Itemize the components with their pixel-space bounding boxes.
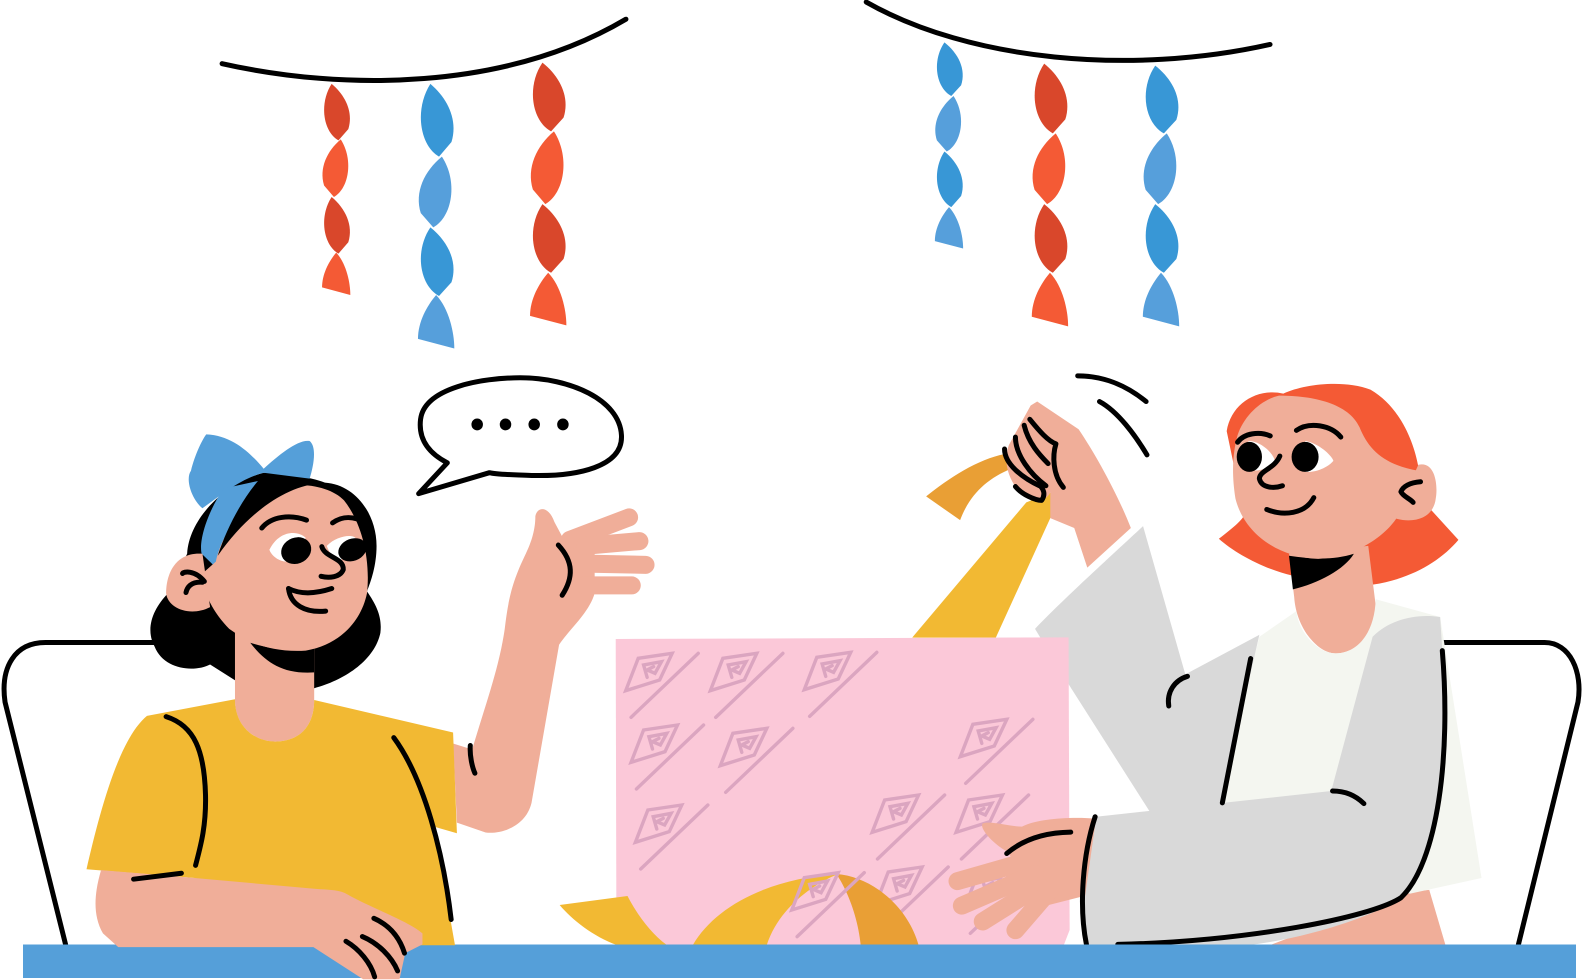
neck shadow [1289,554,1354,589]
lower body [1259,890,1447,949]
ribbon: left tail [560,896,667,945]
chair: left [4,643,156,945]
streamer: blue 1 [418,84,454,349]
face details [1237,425,1421,513]
garlands and streamers [222,2,1270,349]
fingers [1005,419,1063,500]
streamer: red 1 [322,84,350,295]
table [23,944,1576,978]
ear [1394,464,1436,520]
body lines [134,545,570,977]
face details [183,517,370,611]
wrapping paper [616,637,1070,947]
streamer: red 3 [1032,64,1068,326]
paper pattern [626,652,1037,933]
raised arm [1006,402,1131,568]
person: left [87,378,646,979]
neck and collar skin [235,617,314,742]
face [1233,396,1418,559]
garland: right [866,2,1270,60]
chair: right [1444,643,1579,945]
headband [201,481,260,566]
ribbon: arch orange [836,874,919,945]
person: right, background layers [912,376,1482,949]
blue bow [189,434,314,508]
paper pattern over ribbon [792,873,864,937]
neck shadow [250,643,314,673]
hand [957,818,1096,930]
resting arm and hand [96,870,422,979]
white shirt [1209,599,1482,894]
hand and cuff lines [1007,817,1095,944]
streamer: blue 2 [935,42,963,249]
streamer: blue 3 [1143,66,1179,326]
gift box [560,637,1070,947]
garland: left [222,19,626,80]
jacket front and lower sleeve [1084,616,1443,945]
jacket lines [1118,651,1445,944]
neck [1289,546,1376,653]
raised arm and hand [453,509,646,833]
chairs [4,643,1579,945]
speech bubble [419,378,622,494]
ribbon: arch yellow [693,874,838,945]
hair fringe [218,475,325,556]
right person hand on box [957,817,1096,944]
back hair [150,473,381,688]
raised jacket sleeve [1035,526,1259,813]
motion lines [1078,376,1147,455]
streamer: red 2 [530,63,566,325]
face [202,485,368,651]
hair [1219,384,1458,585]
ear [166,554,210,611]
ribbon: held yellow strip [912,489,1061,638]
yellow shirt [87,699,457,945]
ribbon: held dark end [926,454,1011,520]
